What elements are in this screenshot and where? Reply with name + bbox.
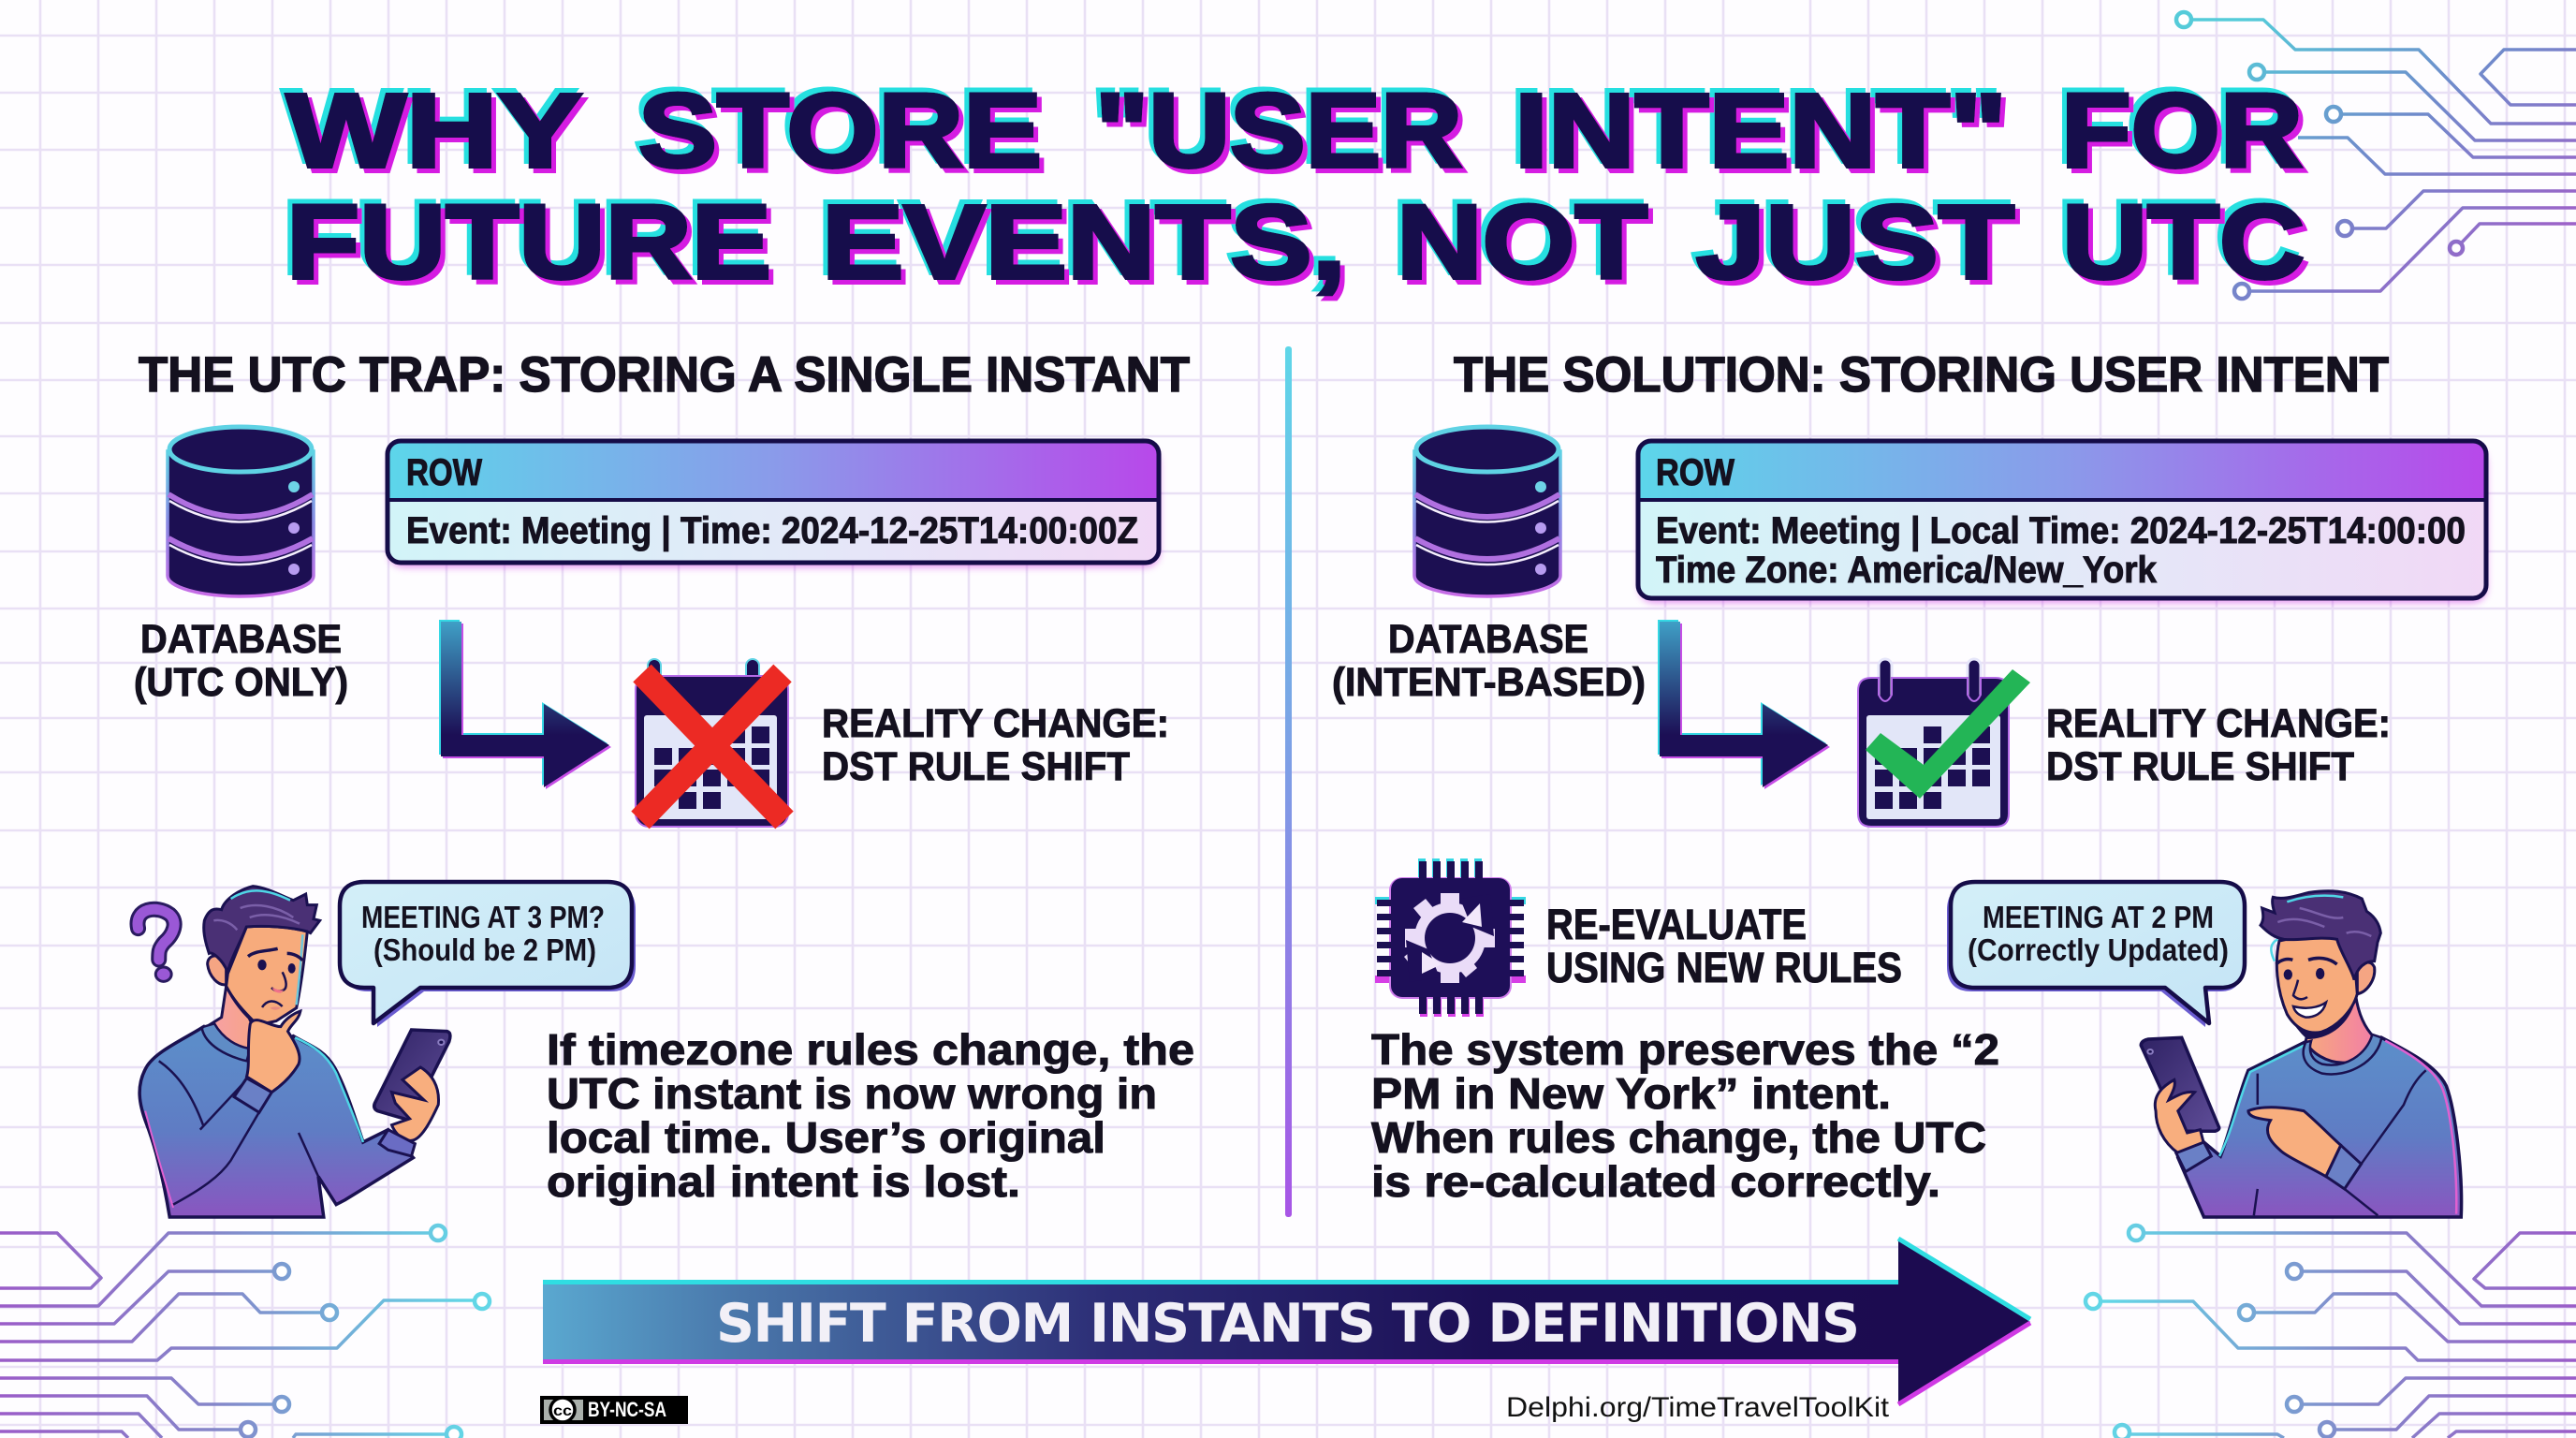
license badge: BY-NC-SA xyxy=(588,1398,666,1421)
arrow: database to reality change xyxy=(1658,620,1830,789)
text block: solution explanation: is re-calculated correctly. xyxy=(1371,1157,1940,1206)
title: EVENTS, xyxy=(822,183,1346,301)
speech bubble: meeting at 3 PM xyxy=(340,882,636,1027)
row card: intent xyxy=(1638,441,2487,603)
speech bubble: meeting at 2 PM xyxy=(1947,882,2245,1027)
label: reality change: REALITY CHANGE: xyxy=(2046,701,2391,746)
row card: intent: Time Zone: America/New_York xyxy=(1656,550,2158,591)
label: reality change: DST RULE SHIFT xyxy=(2046,744,2354,789)
illustration: confused person with phone xyxy=(139,887,450,1217)
row card: UTC instant: ROW xyxy=(406,452,482,493)
title: STORE xyxy=(638,72,1042,189)
text block: UTC trap explanation xyxy=(547,1025,1194,1206)
title: NOT xyxy=(1397,183,1647,301)
center divider xyxy=(1285,346,1292,1217)
circuit traces: bottom left xyxy=(0,1225,490,1438)
title: INTENT" xyxy=(1515,72,2007,189)
label: re-evaluate: RE-EVALUATE xyxy=(1546,901,1807,948)
label: reality change: REALITY CHANGE: xyxy=(822,701,1169,746)
circuit traces: top right xyxy=(2176,12,2576,299)
text block: UTC trap explanation: UTC instant is now wrong in xyxy=(547,1069,1157,1118)
icon: calendar with green check xyxy=(1858,659,2030,827)
speech bubble: meeting at 2 PM: MEETING AT 2 PM xyxy=(1983,900,2214,934)
label: reality change xyxy=(2046,701,2391,789)
text block: solution explanation: The system preserves the “2 xyxy=(1371,1025,1999,1074)
text block: UTC trap explanation: If timezone rules change, the xyxy=(547,1025,1194,1074)
arrow: database to reality change xyxy=(439,620,611,789)
row card: intent: ROW xyxy=(1656,452,1734,493)
speech bubble: meeting at 3 PM: MEETING AT 3 PM? xyxy=(361,900,605,934)
icon: database (intent-based) xyxy=(1414,427,1560,596)
icon: chip with gear and refresh arrows xyxy=(1375,858,1526,1017)
title: WHY xyxy=(286,72,582,189)
banner arrow: shift from instants to definitions xyxy=(543,1239,2030,1404)
speech bubble: meeting at 3 PM: (Should be 2 PM) xyxy=(373,932,596,967)
title: "USER xyxy=(1095,72,1462,189)
icon: calendar with red X xyxy=(636,659,788,827)
icon: question mark xyxy=(138,909,174,981)
license badge: cc xyxy=(553,1403,572,1419)
title: FOR xyxy=(2061,72,2303,189)
title: UTC xyxy=(2062,183,2305,301)
text block: solution explanation: When rules change, the UTC xyxy=(1371,1113,1986,1162)
circuit traces: bottom right xyxy=(2086,1225,2576,1438)
illustration: happy person with phone xyxy=(2141,891,2462,1217)
speech bubble: meeting at 2 PM: (Correctly Updated) xyxy=(1968,932,2229,967)
panel: the UTC trap xyxy=(134,347,1194,1217)
title: JUST xyxy=(1696,183,2014,301)
banner arrow: shift from instants to definitions: SHIFT FROM INSTANTS TO DEFINITIONS xyxy=(716,1293,1860,1355)
label: re-evaluate xyxy=(1546,901,1902,991)
database label: (UTC ONLY) xyxy=(134,660,348,705)
row card: UTC instant: Event: Meeting | Time: 2024-12-25T14:00:00Z xyxy=(406,510,1138,551)
label: re-evaluate: USING NEW RULES xyxy=(1546,944,1902,991)
license badge xyxy=(540,1396,688,1424)
database label: DATABASE xyxy=(1388,617,1588,662)
database label: DATABASE xyxy=(140,617,342,662)
text block: UTC trap explanation: local time. User’s original xyxy=(547,1113,1105,1162)
panel: the solution xyxy=(1332,347,2487,1217)
database label xyxy=(1332,617,1646,705)
icon: database (UTC only) xyxy=(168,427,314,596)
label: reality change: DST RULE SHIFT xyxy=(822,744,1130,789)
label: reality change xyxy=(822,701,1169,789)
heading: UTC trap: THE UTC TRAP: STORING A SINGLE INSTANT xyxy=(139,347,1190,403)
text block: UTC trap explanation: original intent is lost. xyxy=(547,1157,1020,1206)
title: FUTURE xyxy=(286,183,771,301)
heading: the solution: THE SOLUTION: STORING USER INTENT xyxy=(1454,347,2389,403)
text block: solution explanation: PM in New York” intent. xyxy=(1371,1069,1891,1118)
database label xyxy=(134,617,348,705)
row card: UTC instant xyxy=(388,441,1160,567)
row card: intent: Event: Meeting | Local Time: 2024-12-25T14:00:00 xyxy=(1656,510,2466,551)
text block: solution explanation xyxy=(1371,1025,1999,1206)
source link: Delphi.org/TimeTravelToolKit xyxy=(1506,1392,1890,1423)
database label: (INTENT-BASED) xyxy=(1332,660,1646,705)
title xyxy=(286,72,2305,301)
